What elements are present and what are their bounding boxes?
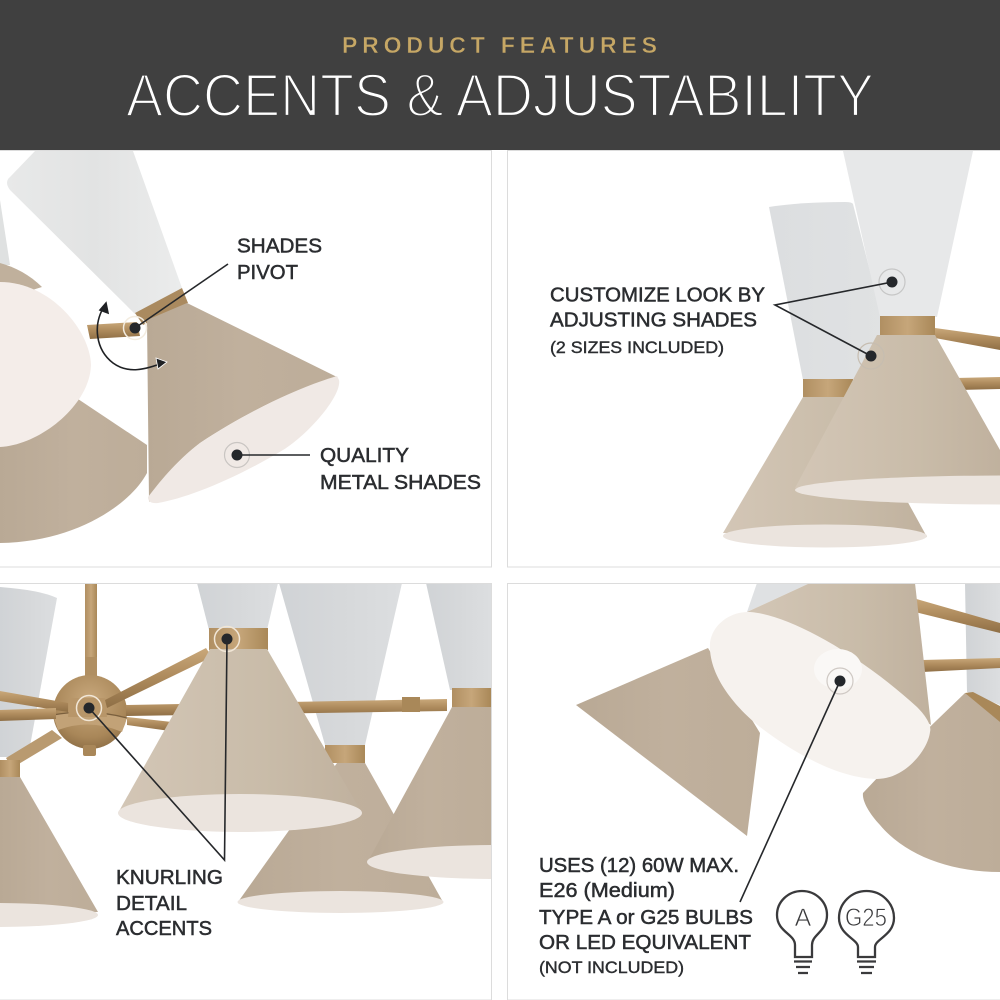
callout: knurling detail accents: DETAIL [116, 893, 187, 915]
panel: customize look [508, 150, 1000, 567]
bulb text: USES (12) 60W MAX. [539, 855, 739, 877]
icon: G25 bulb [839, 891, 894, 973]
callout: knurling detail accents: ACCENTS [116, 918, 212, 940]
title: ACCENTS & ADJUSTABILITY [126, 62, 874, 129]
icon: type A bulb: A [795, 904, 812, 932]
callout: shades pivot [124, 236, 322, 340]
bulb text: E26 (Medium) [539, 880, 675, 902]
rotation arrow [97, 303, 167, 370]
callout: shades pivot: SHADES [237, 236, 322, 258]
icon: G25 bulb: G25 [845, 904, 887, 932]
eyebrow: product features: PRODUCT FEATURES [342, 32, 657, 58]
bulb text: TYPE A or G25 BULBS [539, 907, 753, 929]
panel: bulb specification [508, 583, 1000, 1000]
panel: shades pivot and metal shades [0, 150, 492, 567]
icon: type A bulb [777, 891, 827, 973]
panel: knurling detail accents [0, 583, 492, 1000]
lamp photo: hub, arms and shades [0, 584, 491, 927]
callout: bulb [740, 668, 853, 902]
bulb text: (NOT INCLUDED) [539, 959, 684, 977]
lamp photo: tilted shades [0, 151, 339, 543]
lamp photo: two shade sizes [723, 151, 1000, 548]
callout: knurling detail accents: KNURLING [116, 867, 223, 889]
callout: customize look: (2 SIZES INCLUDED) [550, 339, 724, 357]
bulb text [539, 855, 753, 977]
callout: knurling detail accents [76, 626, 240, 940]
callout: quality metal shades [224, 442, 481, 494]
callout: shades pivot: PIVOT [237, 262, 298, 284]
lamp photo: underside of shades [576, 583, 1000, 872]
header band [0, 0, 1000, 150]
callout: quality metal shades: METAL SHADES [320, 472, 481, 494]
callout: quality metal shades: QUALITY [320, 445, 409, 467]
bulb text: OR LED EQUIVALENT [539, 932, 751, 954]
callout: customize look: ADJUSTING SHADES [550, 310, 757, 332]
callout: customize look [550, 269, 905, 369]
callout: customize look: CUSTOMIZE LOOK BY [550, 284, 765, 306]
